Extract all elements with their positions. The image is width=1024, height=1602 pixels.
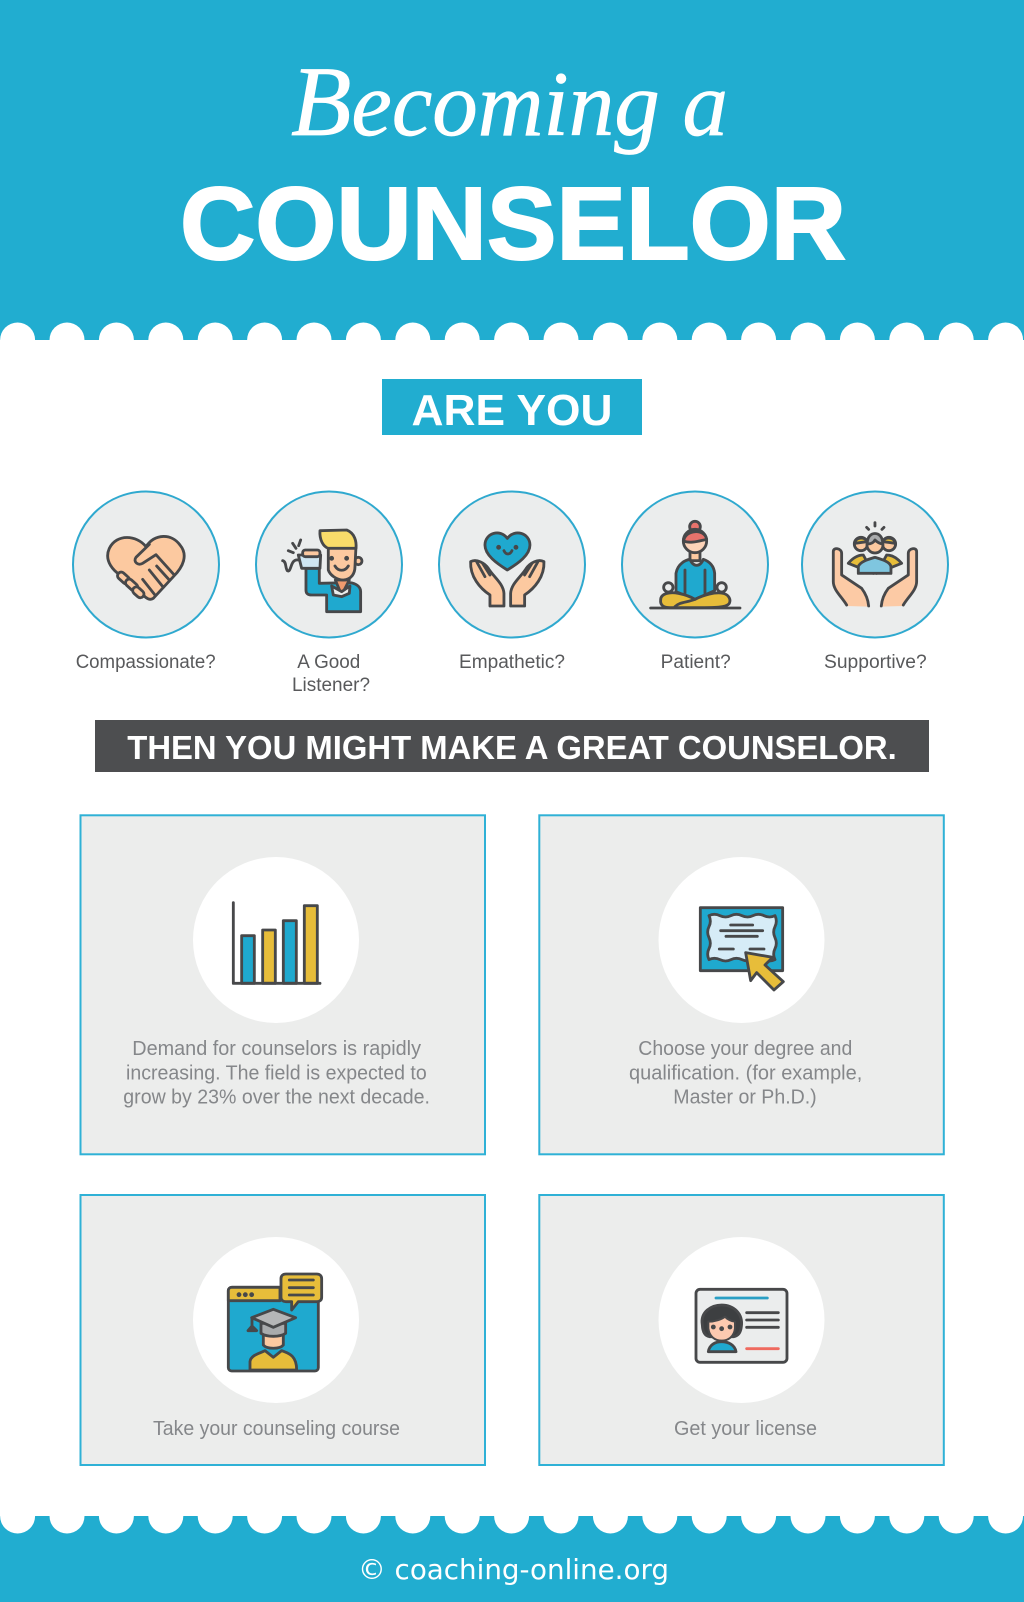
banner: then you might make a great counselor: THEN YOU MIGHT MAKE A GREAT COUNSELOR.: [127, 729, 897, 766]
banner: then you might make a great counselor: [95, 720, 929, 772]
panel: demand: increasing. The field is expected to: [126, 1061, 427, 1084]
trait: supportive: Supportive?: [824, 652, 927, 673]
trait: compassionate: Compassionate?: [76, 652, 216, 673]
header band: [0, 0, 1024, 358]
icon: bar chart: [233, 903, 320, 983]
panel: license: Get your license: [674, 1417, 817, 1440]
trait: empathetic: [439, 492, 585, 673]
icon: meditating woman: [651, 521, 740, 608]
trait: patient: Patient?: [661, 652, 731, 673]
heading: are you: ARE YOU: [412, 386, 612, 435]
trait: supportive: [802, 492, 948, 673]
footer text: © coaching-online.org: [358, 1553, 669, 1586]
trait: a good listener: A Good: [297, 652, 360, 673]
icon: handshake heart: [108, 536, 184, 599]
icon: man with phone: [283, 530, 362, 612]
icon: online course window: [228, 1274, 322, 1371]
panel: degree: [539, 815, 944, 1154]
icon: certificate with cursor: [700, 908, 783, 990]
trait: compassionate: [73, 492, 219, 673]
panel: degree: Master or Ph.D.): [673, 1085, 817, 1108]
icon: hands holding group: [833, 523, 917, 607]
trait: patient: [622, 492, 768, 673]
title: script line: Becoming a: [291, 46, 728, 157]
title: main word: COUNSELOR: [180, 166, 846, 281]
panel: course: [80, 1195, 485, 1465]
panel: demand: grow by 23% over the next decade.: [123, 1085, 430, 1108]
panel: demand: [80, 815, 485, 1154]
icon: license card: [696, 1289, 787, 1362]
panel: degree: Choose your degree and: [638, 1037, 852, 1060]
panel: demand: Demand for counselors is rapidly: [132, 1037, 422, 1060]
panel: license: [539, 1195, 944, 1465]
trait: a good listener: [256, 492, 402, 696]
panel: course: Take your counseling course: [153, 1417, 400, 1440]
trait: empathetic: Empathetic?: [459, 652, 565, 673]
icon: heart in hands: [471, 533, 544, 606]
heading: are you: [382, 379, 642, 435]
trait: a good listener: Listener?: [292, 675, 370, 696]
footer band: [0, 1498, 1024, 1602]
panel: degree: qualification. (for example,: [629, 1061, 862, 1084]
